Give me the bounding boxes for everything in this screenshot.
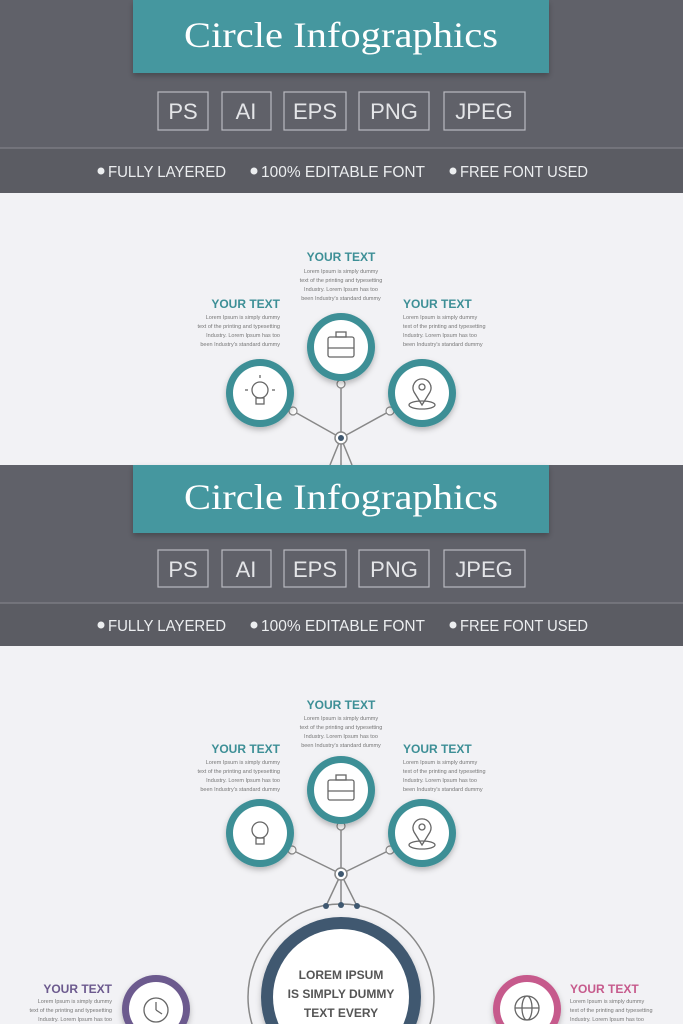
- format boxes: JPEG: [455, 99, 513, 124]
- infographic 2: [29, 698, 653, 1024]
- infographic 1: been Industry's standard dummy: [403, 342, 483, 348]
- header 2: Circle Infographics: [184, 477, 498, 517]
- infographic 1: text of the printing and typesetting: [300, 278, 382, 284]
- format boxes: [158, 92, 525, 130]
- header 2: FULLY LAYERED: [108, 618, 226, 635]
- infographic 2: been Industry's standard dummy: [403, 787, 483, 793]
- infographic 1: Industry. Lorem Ipsum has too: [206, 333, 280, 339]
- header 2: 100% EDITABLE FONT: [261, 618, 425, 635]
- icon: briefcase: [328, 332, 354, 357]
- panel 2 background: [0, 646, 683, 1024]
- texts: YOUR TEXT: [307, 698, 376, 712]
- header 2: EPS: [293, 557, 337, 582]
- title banner: [133, 0, 549, 73]
- format boxes: PNG: [370, 99, 418, 124]
- header 2: AI: [236, 557, 256, 582]
- header 2: [0, 465, 683, 646]
- title banner: Circle Infographics: [184, 15, 498, 55]
- texts: [211, 698, 472, 756]
- infographic 2: text of the printing and typesetting: [197, 769, 280, 775]
- infographic 2: been Industry's standard dummy: [301, 743, 381, 749]
- panel 1 background: [0, 193, 683, 465]
- feature bullets: FULLY LAYERED: [108, 164, 226, 181]
- infographic 2: Industry. Lorem Ipsum has too: [570, 1017, 644, 1023]
- texts: YOUR TEXT: [211, 742, 281, 756]
- texts: YOUR TEXT: [307, 250, 376, 264]
- infographic 2: Industry. Lorem Ipsum has too: [38, 1017, 112, 1023]
- texts: [211, 250, 472, 311]
- infographic 1: text of the printing and typesetting: [197, 324, 280, 330]
- infographic 1: been Industry's standard dummy: [200, 342, 280, 348]
- infographic 2: IS SIMPLY DUMMY: [288, 987, 394, 1001]
- icons: [144, 775, 539, 1022]
- infographic 1: Lorem Ipsum is simply dummy: [304, 269, 378, 275]
- feature bullets: FREE FONT USED: [460, 164, 588, 181]
- infographic 2: YOUR TEXT: [43, 982, 113, 996]
- format boxes: EPS: [293, 99, 337, 124]
- infographic 2: text of the printing and typesetting: [300, 725, 382, 731]
- infographic 2: text of the printing and typesetting: [403, 769, 486, 775]
- header 2: JPEG: [455, 557, 513, 582]
- infographic 2: Lorem Ipsum is simply dummy: [570, 999, 645, 1005]
- infographic 2: LOREM IPSUM: [299, 968, 383, 982]
- format boxes: PS: [168, 99, 198, 124]
- infographic 2: Lorem Ipsum is simply dummy: [304, 716, 378, 722]
- icon: pin: [409, 379, 435, 409]
- infographic 2: text of the printing and typesetting: [29, 1008, 112, 1014]
- texts: YOUR TEXT: [403, 297, 472, 311]
- format boxes: AI: [236, 99, 256, 124]
- infographic 2: Lorem Ipsum is simply dummy: [206, 760, 280, 766]
- purple and pink circles: [122, 975, 190, 1024]
- infographic 2: Industry. Lorem Ipsum has too: [206, 778, 280, 784]
- header 2: FREE FONT USED: [460, 618, 588, 635]
- infographic 1: Lorem Ipsum is simply dummy: [206, 315, 280, 321]
- infographic 1: [197, 250, 486, 465]
- infographic 2: Industry. Lorem Ipsum has too: [403, 778, 477, 784]
- icon: bulb: [245, 375, 275, 404]
- infographic 2: been Industry's standard dummy: [200, 787, 280, 793]
- infographic 2: Lorem Ipsum is simply dummy: [38, 999, 112, 1005]
- header 2: PNG: [370, 557, 418, 582]
- big center circle: [261, 917, 421, 1024]
- feature bullets: 100% EDITABLE FONT: [261, 164, 425, 181]
- infographic 1: text of the printing and typesetting: [403, 324, 486, 330]
- header 1: [0, 0, 683, 193]
- infographic 1: Industry. Lorem Ipsum has too: [403, 333, 477, 339]
- infographic 2: Lorem Ipsum is simply dummy: [403, 760, 478, 766]
- texts: YOUR TEXT: [211, 297, 281, 311]
- texts: YOUR TEXT: [403, 742, 472, 756]
- infographic 1: been Industry's standard dummy: [301, 296, 381, 302]
- infographic 2: TEXT EVERY: [304, 1006, 378, 1020]
- header 2: PS: [168, 557, 198, 582]
- infographic 2: text of the printing and typesetting: [570, 1008, 653, 1014]
- infographic 2: YOUR TEXT: [570, 982, 639, 996]
- infographic 1: Lorem Ipsum is simply dummy: [403, 315, 478, 321]
- infographic 1: Industry. Lorem Ipsum has too: [304, 287, 378, 293]
- feature bullets: [98, 164, 588, 181]
- infographic 2: Industry. Lorem Ipsum has too: [304, 734, 378, 740]
